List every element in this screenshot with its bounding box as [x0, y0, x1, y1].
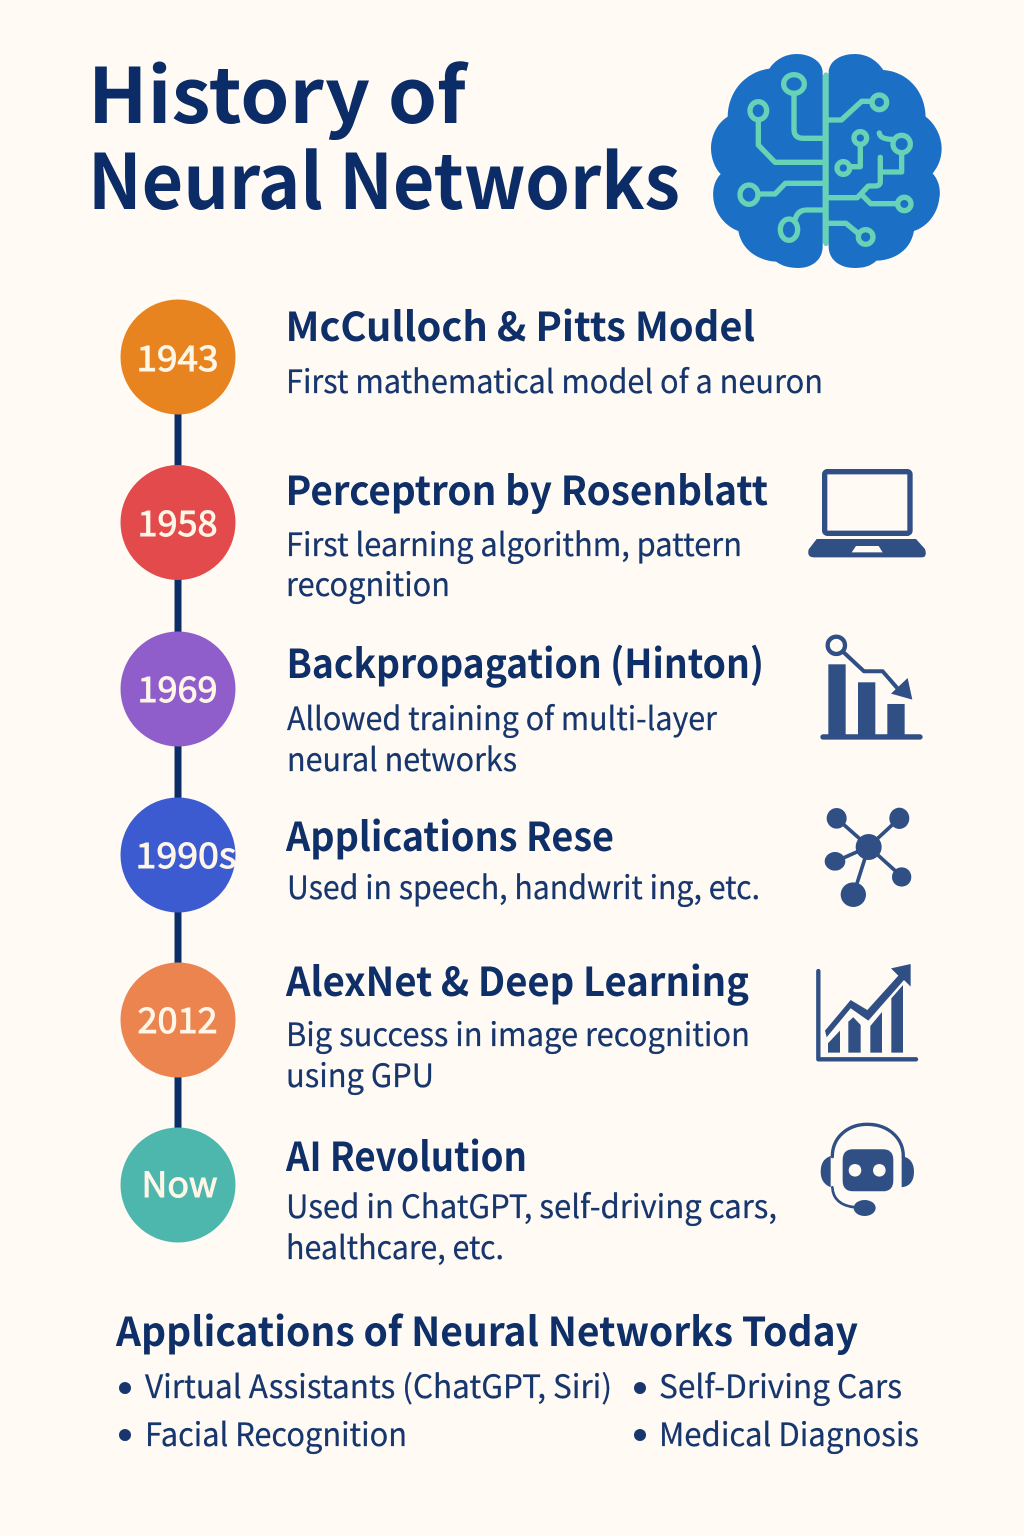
year badge 1990s: 1990s [136, 828, 236, 879]
description 1958: recognition [286, 560, 450, 606]
bullet: facial recognition: Facial Recognition [145, 1410, 407, 1456]
heading 1990s: Applications Rese [285, 805, 614, 863]
icon: network nodes [825, 808, 911, 907]
heading now: AI Revolution [285, 1125, 527, 1183]
year badge 1990s [120, 798, 236, 912]
timeline connector [174, 357, 182, 1185]
milestone: 1990s [120, 798, 911, 912]
description 1990s: Used in speech, handwrit ing, etc. [287, 863, 760, 909]
description 1969: neural networks [287, 735, 517, 781]
title: Neural Networks [88, 121, 680, 231]
description 2012: Big success in image recognition [286, 1010, 750, 1056]
heading 2012: AlexNet & Deep Learning [285, 950, 749, 1008]
section: applications today [115, 1300, 919, 1456]
section heading: Applications of Neural Networks Today [115, 1300, 858, 1358]
bullet: medical diagnosis: Medical Diagnosis [659, 1410, 919, 1456]
year badge Now: Now [142, 1157, 218, 1208]
year badge 1969 [120, 632, 236, 746]
year badge 1958 [120, 465, 236, 580]
description 2012 [286, 1010, 750, 1097]
icon: circuit brain [711, 54, 942, 268]
year badge 1958: 1958 [138, 496, 218, 547]
icon: laptop [808, 472, 926, 557]
year badge 1969: 1969 [138, 662, 218, 713]
title: History of [88, 35, 469, 145]
description 1958 [286, 520, 742, 606]
description now: Used in ChatGPT, self-driving cars, [286, 1182, 777, 1228]
description 1969 [287, 694, 718, 781]
bullet: self-driving cars: Self-Driving Cars [659, 1362, 902, 1408]
milestone: 1969 [120, 632, 923, 781]
year badge 2012: 2012 [138, 993, 218, 1044]
milestone: now [120, 1124, 914, 1269]
heading 1958: Perceptron by Rosenblatt [286, 459, 768, 517]
year badge 1943: 1943 [136, 331, 218, 382]
icon: declining bar chart [820, 637, 923, 740]
description 1969: Allowed training of multi-layer [287, 694, 718, 740]
description now [286, 1182, 777, 1269]
description 2012: using GPU [286, 1051, 434, 1097]
description 1943: First mathematical model of a neuron [286, 357, 823, 403]
description now: healthcare, etc. [286, 1223, 504, 1269]
milestone: 1958 [120, 459, 926, 606]
year badge Now [120, 1128, 236, 1242]
milestone: 1943 [120, 295, 823, 414]
year badge 2012 [120, 962, 236, 1078]
description 1958: First learning algorithm, pattern [286, 520, 742, 566]
year badge 1943 [120, 300, 236, 414]
title [88, 35, 680, 231]
bullet: virtual assistants: Virtual Assistants (ChatGPT, Siri) [145, 1362, 612, 1408]
milestone: 2012 [120, 950, 916, 1097]
icon: rising chart [818, 964, 916, 1059]
icon: robot headset [821, 1124, 914, 1216]
heading 1943: McCulloch & Pitts Model [286, 295, 755, 353]
heading 1969: Backpropagation (Hinton) [286, 632, 764, 690]
